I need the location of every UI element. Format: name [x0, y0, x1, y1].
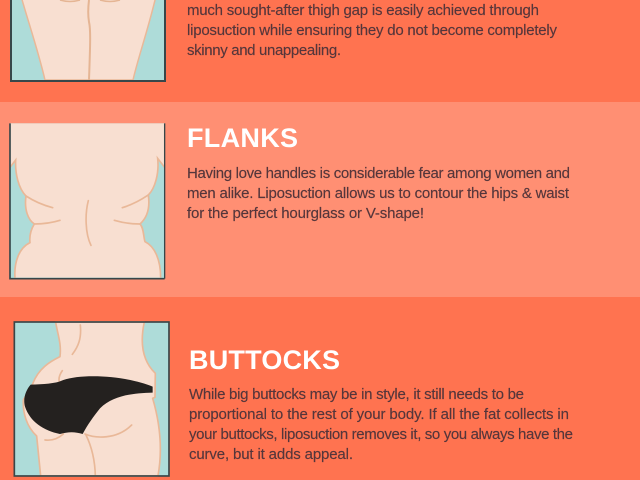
text: thigh description: liposuction while ensuring they do not become completely: [187, 22, 558, 39]
text: thigh description: [187, 2, 558, 59]
panel: buttocks section: [0, 297, 640, 480]
text: flanks description: [187, 165, 570, 222]
text: buttocks description: proportional to the rest of your body. If all the fat collects in: [189, 406, 569, 423]
icon: black underwear: [24, 376, 153, 434]
illustration: thighs: [10, 0, 166, 82]
text: flanks description: Having love handles is considerable fear among women and: [187, 165, 570, 182]
panel: thigh section: [0, 0, 640, 102]
text: thigh description: skinny and unappealing.: [187, 42, 341, 59]
illustration: buttocks: [14, 322, 169, 476]
heading: flanks: FLANKS: [187, 123, 298, 153]
text: buttocks description: [189, 386, 573, 463]
text: flanks description: men alike. Liposuction allows us to contour the hips & waist: [187, 185, 570, 202]
text: flanks description: for the perfect hourglass or V-shape!: [187, 205, 424, 222]
illustration: flanks: [10, 123, 165, 279]
panel: flanks section: [0, 102, 640, 297]
text: buttocks description: While big buttocks may be in style, it still needs to be: [189, 386, 524, 403]
text: thigh description: much sought-after thigh gap is easily achieved through: [187, 2, 539, 19]
heading: buttocks: BUTTOCKS: [189, 345, 340, 375]
text: buttocks description: your buttocks, liposuction removes it, so you always have the: [189, 426, 573, 443]
text: buttocks description: curve, but it adds appeal.: [189, 446, 353, 463]
